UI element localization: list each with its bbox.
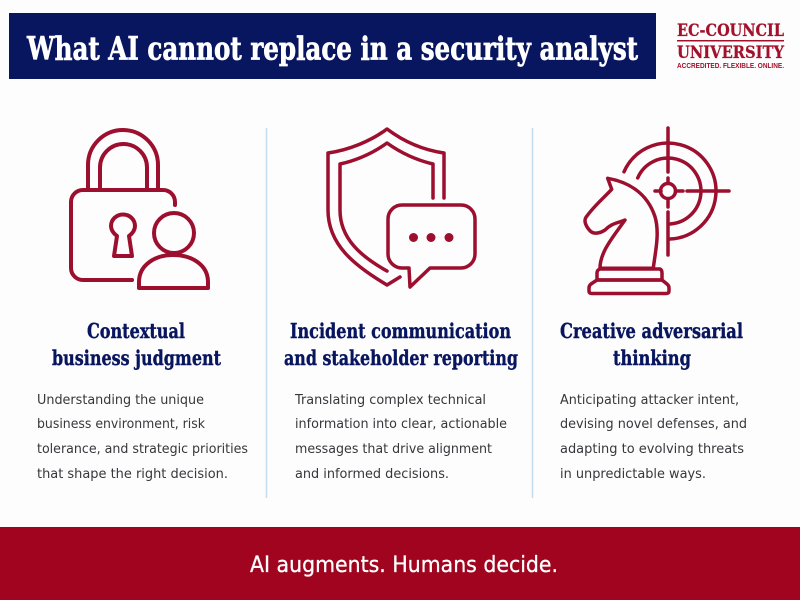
divider lines — [266, 128, 532, 498]
column 1 heading: business judgment — [52, 346, 221, 370]
column 3 heading: thinking — [613, 346, 691, 370]
column 1 description: tolerance, and strategic priorities — [37, 442, 248, 457]
column 3 description: Anticipating attacker intent, — [560, 393, 739, 408]
column 2 description — [294, 393, 507, 482]
column 1 heading — [52, 319, 221, 370]
column 1 description: business environment, risk — [37, 417, 205, 432]
logo: EC-Council University: UNIVERSITY — [677, 43, 785, 63]
column 3: creative adversarial thinking — [560, 319, 747, 482]
column 1 description — [37, 393, 248, 482]
column 3 heading — [560, 319, 743, 370]
column 3 description: devising novel defenses, and — [560, 417, 747, 432]
column 2: incident communication — [284, 319, 518, 482]
title banner — [9, 13, 656, 79]
column 2 description: and informed decisions. — [295, 467, 449, 482]
column 2 heading: Incident communication — [290, 319, 511, 343]
logo: EC-Council University: ACCREDITED. FLEXIBLE. ONLINE. — [677, 61, 784, 70]
column 2 description: Translating complex technical — [294, 393, 486, 408]
column 1: contextual business judgment — [37, 319, 248, 482]
column 1 description: Understanding the unique — [37, 393, 204, 408]
title banner: What AI cannot replace in a security analyst — [26, 30, 638, 68]
icon: shield with speech bubble — [328, 129, 475, 287]
column 1 heading: Contextual — [87, 319, 185, 343]
column 3 heading: Creative adversarial — [560, 319, 743, 343]
column 2 heading: and stakeholder reporting — [284, 346, 518, 370]
column 2 description: messages that drive alignment — [295, 442, 492, 457]
column 3 description: in unpredictable ways. — [560, 467, 706, 482]
column 3 description: adapting to evolving threats — [560, 442, 744, 457]
column 3 description — [560, 393, 747, 482]
footer banner: AI augments. Humans decide. — [250, 553, 558, 578]
column 1 description: that shape the right decision. — [37, 467, 228, 482]
column 2 description: information into clear, actionable — [295, 417, 507, 432]
icon: padlock with person — [71, 130, 208, 288]
footer banner — [0, 527, 800, 600]
logo: EC-Council University: EC-COUNCIL — [677, 21, 784, 41]
logo: EC-Council University — [677, 21, 785, 70]
column 2 heading — [284, 319, 518, 370]
icon: chess knight with target — [585, 128, 729, 294]
